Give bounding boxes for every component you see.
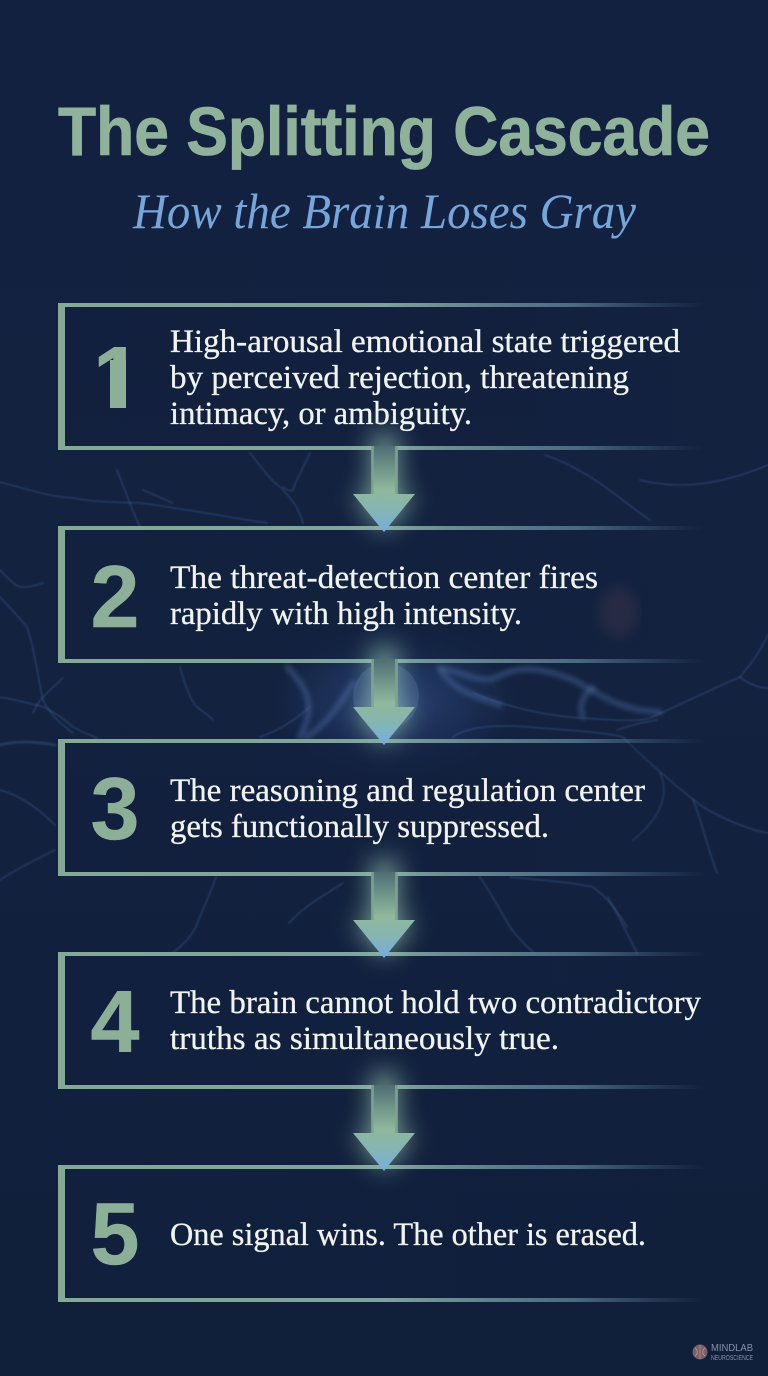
- step 3 number: 3: [91, 759, 139, 858]
- neuron network background: [0, 453, 768, 953]
- arrow 2 to 3: [353, 647, 415, 745]
- logo text: MINDLAB: [711, 1342, 753, 1354]
- step 1 number: [98, 347, 126, 408]
- icon: brain: [692, 1344, 708, 1360]
- step 4 text: The brain cannot hold two contradictory: [170, 985, 702, 1021]
- step 4 text: truths as simultaneously true.: [170, 1021, 559, 1057]
- title: The Splitting Cascade: [58, 93, 710, 170]
- arrow 3 to 4: [353, 860, 415, 958]
- step 3 text: gets functionally suppressed.: [170, 809, 549, 845]
- logo text: [711, 1342, 753, 1362]
- step 1 number: 1: [93, 328, 142, 427]
- step 1 text: [170, 324, 680, 432]
- step 4 text: [170, 985, 702, 1057]
- faint warm spot near neuron: [598, 586, 638, 638]
- panel: step 5: [58, 1165, 705, 1302]
- step 3 text: The reasoning and regulation center: [170, 773, 645, 809]
- panel: step 4: [58, 952, 705, 1089]
- arrow 4 to 5: [353, 1073, 415, 1171]
- step 2 number: 2: [91, 547, 139, 646]
- logo: MindLab Neuroscience: [692, 1342, 753, 1362]
- step 1 text: by perceived rejection, threatening: [170, 360, 629, 396]
- arrow 1 to 2: [353, 434, 415, 532]
- step 2 text: rapidly with high intensity.: [170, 596, 522, 632]
- panel: step 3: [58, 739, 705, 876]
- subtitle: How the Brain Loses Gray: [132, 183, 637, 239]
- step 5 number: 5: [91, 1184, 139, 1283]
- logo text: NEUROSCIENCE: [711, 1355, 753, 1362]
- step 2 text: [170, 560, 598, 632]
- step 4 number: 4: [91, 972, 140, 1071]
- step 1 text: High-arousal emotional state triggered: [170, 324, 680, 360]
- panel: step 1: [58, 303, 705, 450]
- step 2 text: The threat-detection center fires: [170, 560, 598, 596]
- panel: step 2: [58, 526, 705, 663]
- step 1 text: intimacy, or ambiguity.: [170, 396, 472, 432]
- step 5 text: One signal wins. The other is erased.: [170, 1217, 646, 1253]
- step 3 text: [170, 773, 645, 845]
